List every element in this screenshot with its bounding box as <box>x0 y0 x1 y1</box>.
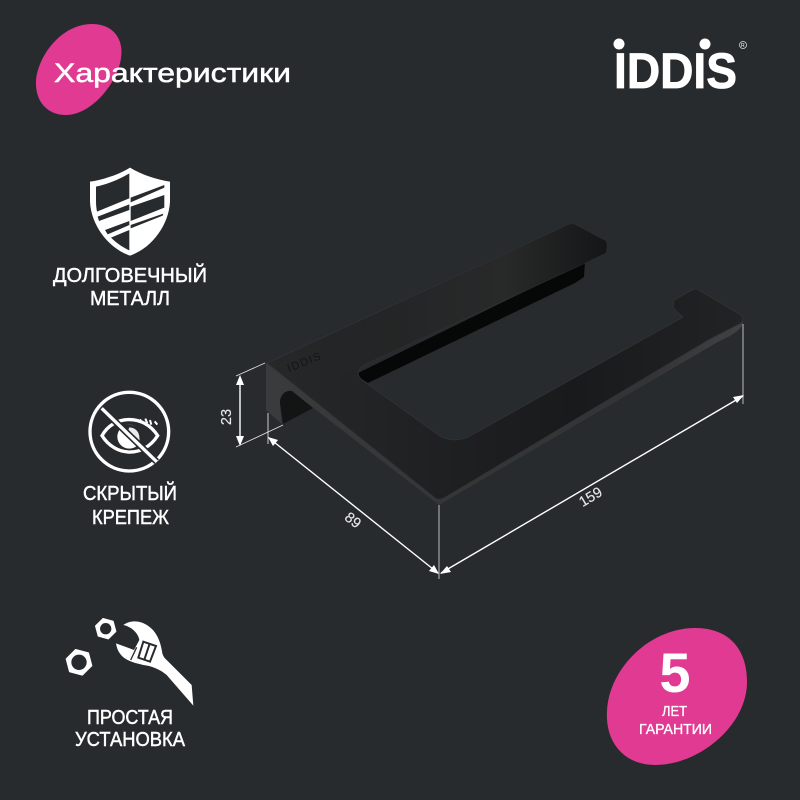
nut large <box>66 650 92 675</box>
label: hidden mount: КРЕПЕЖ <box>92 507 169 529</box>
nut small <box>96 619 116 639</box>
label: easy installation: ПРОСТАЯ <box>87 707 173 729</box>
logo: IDDIS: IDDIS <box>614 43 737 99</box>
label: durable metal <box>53 263 207 310</box>
heading blob <box>36 24 122 115</box>
icon: crossed-out eye <box>90 392 169 471</box>
label: durable metal: ДОЛГОВЕЧНЫЙ <box>53 263 207 287</box>
dimension: depth 89 <box>268 437 439 574</box>
label: durable metal: МЕТАЛЛ <box>90 288 170 310</box>
wrench <box>116 621 193 706</box>
product: black toilet paper holder <box>266 224 743 505</box>
logo: IDDIS: R <box>741 43 745 49</box>
dimension: height 23 <box>219 363 283 447</box>
warranty badge: ГАРАНТИИ <box>639 721 712 738</box>
dimension: depth 89: 89 <box>341 510 364 532</box>
underside of back arm <box>358 262 585 383</box>
icon: shield <box>90 168 170 256</box>
warranty badge <box>607 628 747 765</box>
label: hidden mount: СКРЫТЫЙ <box>83 481 177 505</box>
title: Характеристики <box>54 58 291 88</box>
arch <box>280 391 313 424</box>
label: easy installation: УСТАНОВКА <box>75 729 186 751</box>
dimension: length 159 <box>439 324 744 579</box>
icon: wrench and nuts <box>66 619 193 706</box>
back arm shading <box>320 224 607 374</box>
label: easy installation <box>75 707 186 751</box>
rim and left face <box>266 320 743 505</box>
label: hidden mount <box>83 481 177 529</box>
product logo: IDDIS <box>286 351 323 375</box>
warranty badge: ЛЕТ <box>662 703 687 720</box>
dimension: height 23: 23 <box>219 409 235 425</box>
top face <box>267 224 743 499</box>
dimension: length 159: 159 <box>576 484 605 511</box>
warranty badge: 5 <box>659 641 691 704</box>
